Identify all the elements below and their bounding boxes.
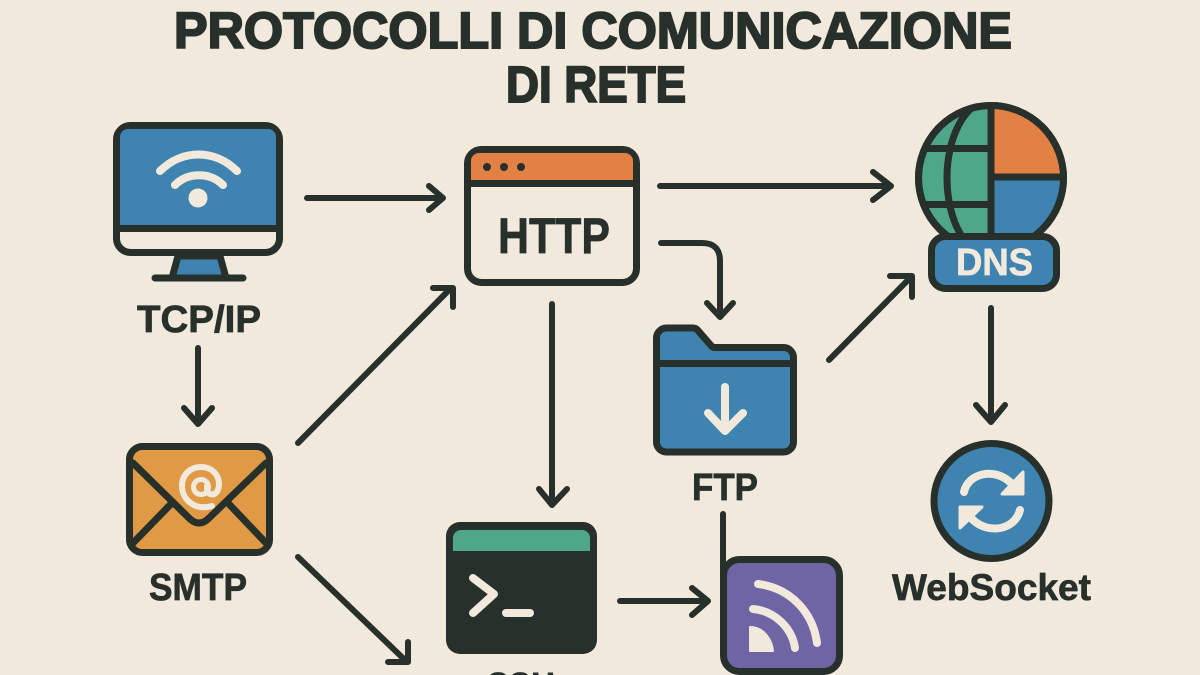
arrow: SSH to RSS bbox=[620, 588, 708, 615]
label: SMTP: SMTP bbox=[149, 567, 247, 609]
arrow: HTTP to FTP bbox=[661, 243, 733, 317]
icon: DNS globe bbox=[915, 102, 1067, 292]
label: WebSocket: WebSocket bbox=[892, 567, 1091, 608]
icon: HTTP browser window: HTTP bbox=[498, 208, 610, 264]
icon: DNS globe: DNS bbox=[956, 242, 1033, 284]
icon: SSH terminal bbox=[446, 522, 597, 654]
arrow: TCP/IP to SMTP bbox=[184, 348, 212, 424]
arrow: SMTP to HTTP bbox=[298, 288, 453, 443]
icon: RSS feed box bbox=[724, 560, 840, 672]
icon: FTP folder bbox=[656, 328, 794, 452]
arrow: HTTP to SSH bbox=[539, 304, 567, 505]
arrow: SMTP to SSH bbox=[298, 557, 408, 662]
icon: WebSocket sync circle bbox=[934, 444, 1049, 558]
line: FTP to RSS bbox=[720, 514, 726, 575]
arrow: DNS to WebSocket bbox=[976, 308, 1005, 422]
icon: SMTP envelope bbox=[130, 446, 270, 552]
icon: HTTP browser window bbox=[468, 150, 636, 282]
arrow: FTP to DNS bbox=[829, 276, 912, 360]
icon: TCP/IP monitor bbox=[116, 126, 280, 278]
title bbox=[174, 2, 1012, 113]
label: TCP/IP: TCP/IP bbox=[137, 299, 261, 341]
label: FTP: FTP bbox=[692, 467, 758, 509]
arrow: HTTP to DNS bbox=[660, 172, 891, 200]
title: PROTOCOLLI DI COMUNICAZIONE bbox=[174, 2, 1012, 59]
arrow: TCP/IP to HTTP bbox=[307, 186, 443, 210]
title: DI RETE bbox=[506, 56, 686, 113]
